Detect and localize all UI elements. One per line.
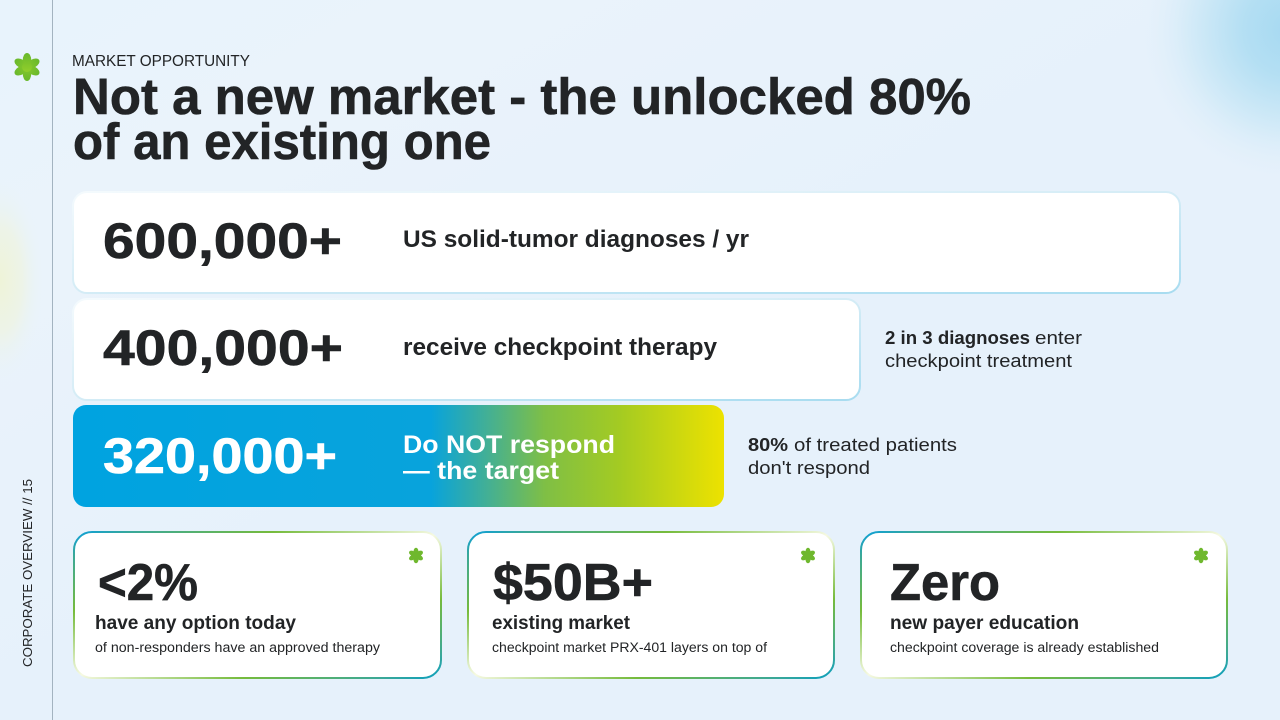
panel: 600,000+ diagnoses [73, 192, 1180, 293]
heading: existing market: existing market [492, 613, 631, 634]
note: 80% of treated patients: of treated patients [794, 435, 957, 455]
note: 2 in 3 diagnoses: 2 in 3 diagnoses [885, 328, 1030, 348]
stat: 400,000+: 400,000+ [103, 320, 343, 376]
panel: 50B market [468, 532, 834, 678]
stat: 600,000+: 600,000+ [103, 213, 342, 269]
eyebrow: MARKET OPPORTUNITY [72, 53, 250, 70]
stat: under 2 percent: <2% [98, 554, 198, 612]
label: do not respond [403, 431, 615, 485]
description: checkpoint market PRX-401 layers on top of [492, 640, 767, 655]
sidebar page label: CORPORATE OVERVIEW // 15 [21, 479, 35, 667]
icon: green asterisk [800, 548, 816, 563]
panel: 320,000+ target [73, 405, 724, 507]
description: checkpoint coverage is already established [890, 640, 1159, 655]
panel: 400,000+ checkpoint therapy [73, 299, 860, 400]
stat: Zero: Zero [890, 554, 1000, 612]
note: 2 in 3 diagnoses: checkpoint treatment [885, 351, 1072, 371]
label: do not respond: Do NOT respond [403, 431, 615, 459]
title: of an existing one [73, 113, 491, 170]
title [73, 68, 971, 170]
stat: $50B+: $50B+ [493, 554, 653, 612]
icon: green flower logo [13, 53, 41, 81]
label: checkpoint therapy: receive checkpoint therapy [403, 334, 718, 361]
label: diagnoses: US solid-tumor diagnoses / yr [403, 226, 749, 253]
panel: under 2 percent [74, 532, 441, 678]
sidebar rule [52, 0, 53, 720]
note: 80% of treated patients: don't respond [748, 458, 870, 478]
icon: green asterisk [408, 548, 424, 563]
heading: have any option today: have any option today [95, 613, 296, 634]
description: of non-responders have an approved therapy [95, 640, 380, 655]
label: do not respond: — the target [403, 457, 560, 485]
heading: new payer education: new payer education [890, 613, 1079, 634]
note: 2 in 3 diagnoses [885, 328, 1082, 371]
note: 80% of treated patients [748, 435, 957, 478]
icon: green asterisk [1193, 548, 1209, 563]
title: Not a new market - the unlocked 80% [73, 68, 971, 125]
note: 80% of treated patients: 80% [748, 435, 788, 455]
stat: 320,000+: 320,000+ [103, 428, 337, 484]
note: 2 in 3 diagnoses: enter [1035, 328, 1082, 348]
panel: zero payer education [861, 532, 1227, 678]
